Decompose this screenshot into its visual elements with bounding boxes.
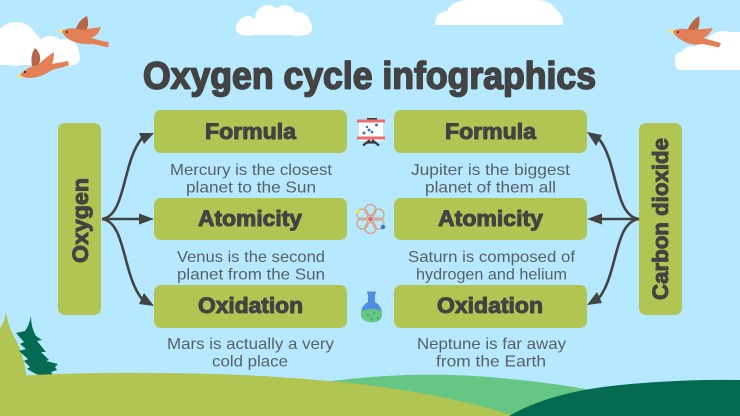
- card: Oxidation right: [394, 285, 587, 328]
- card: Formula right: Formula: [445, 119, 537, 144]
- hill: light green: [0, 373, 515, 416]
- panel: Oxygen: [58, 123, 101, 315]
- text: Jupiter: [411, 162, 571, 196]
- hill: mid green: [332, 375, 590, 416]
- panel: Oxygen: Oxygen: [68, 178, 93, 263]
- text: Saturn: Saturn is composed of: [408, 249, 576, 266]
- bird 3: [667, 16, 721, 48]
- card: Formula left: [154, 110, 347, 153]
- text: Mars: Mars is actually a very: [167, 336, 334, 353]
- bird 1: [56, 16, 109, 48]
- text: Venus: planet from the Sun: [177, 266, 325, 284]
- cloud: top centre: [236, 5, 312, 36]
- card: Atomicity right: Atomicity: [438, 206, 544, 231]
- text: Saturn: hydrogen and helium: [416, 266, 567, 284]
- cloud: top left: [0, 22, 80, 67]
- bird 2: [16, 48, 69, 78]
- panel: Carbon dioxide: [639, 123, 682, 315]
- card: Oxidation right: Oxidation: [437, 293, 543, 318]
- icon: atom: [356, 204, 385, 234]
- text: Jupiter: Jupiter is the biggest: [411, 162, 571, 179]
- text: Mercury: [170, 162, 333, 196]
- card: Oxidation left: Oxidation: [198, 293, 303, 318]
- title: Oxygen cycle infographics: [143, 56, 596, 98]
- card: Atomicity right: [394, 198, 587, 240]
- panel: Carbon dioxide: Carbon dioxide: [648, 138, 673, 300]
- card: Formula left: Formula: [205, 119, 297, 144]
- text: Mercury: planet to the Sun: [186, 180, 316, 196]
- text: Neptune: Neptune is far away: [417, 336, 566, 353]
- card: Atomicity left: Atomicity: [198, 206, 303, 231]
- text: Venus: Venus is the second: [177, 249, 325, 266]
- card: Formula right: [394, 110, 587, 153]
- hill: light green spike: [0, 312, 27, 380]
- text: Mars: cold place: [212, 354, 288, 370]
- arrows: oxygen to cards: [102, 133, 154, 306]
- tree: [16, 316, 58, 375]
- icon: presentation board: [357, 118, 385, 146]
- text: Venus: [177, 249, 325, 284]
- hill: dark green: [509, 380, 740, 416]
- cloud: top right of centre: [435, 0, 563, 25]
- card: Atomicity left: [154, 198, 347, 240]
- arrows: carbon dioxide to cards: [587, 132, 639, 305]
- text: Saturn: [408, 249, 576, 284]
- text: Neptune: from the Earth: [436, 354, 546, 370]
- icon: flask: [361, 292, 382, 322]
- card: Oxidation left: [154, 285, 347, 328]
- text: Neptune: [417, 336, 566, 370]
- text: Jupiter: planet of them all: [425, 180, 556, 196]
- text: Mars: [167, 336, 334, 370]
- cloud: far right: [675, 31, 740, 70]
- text: Mercury: Mercury is the closest: [170, 162, 333, 179]
